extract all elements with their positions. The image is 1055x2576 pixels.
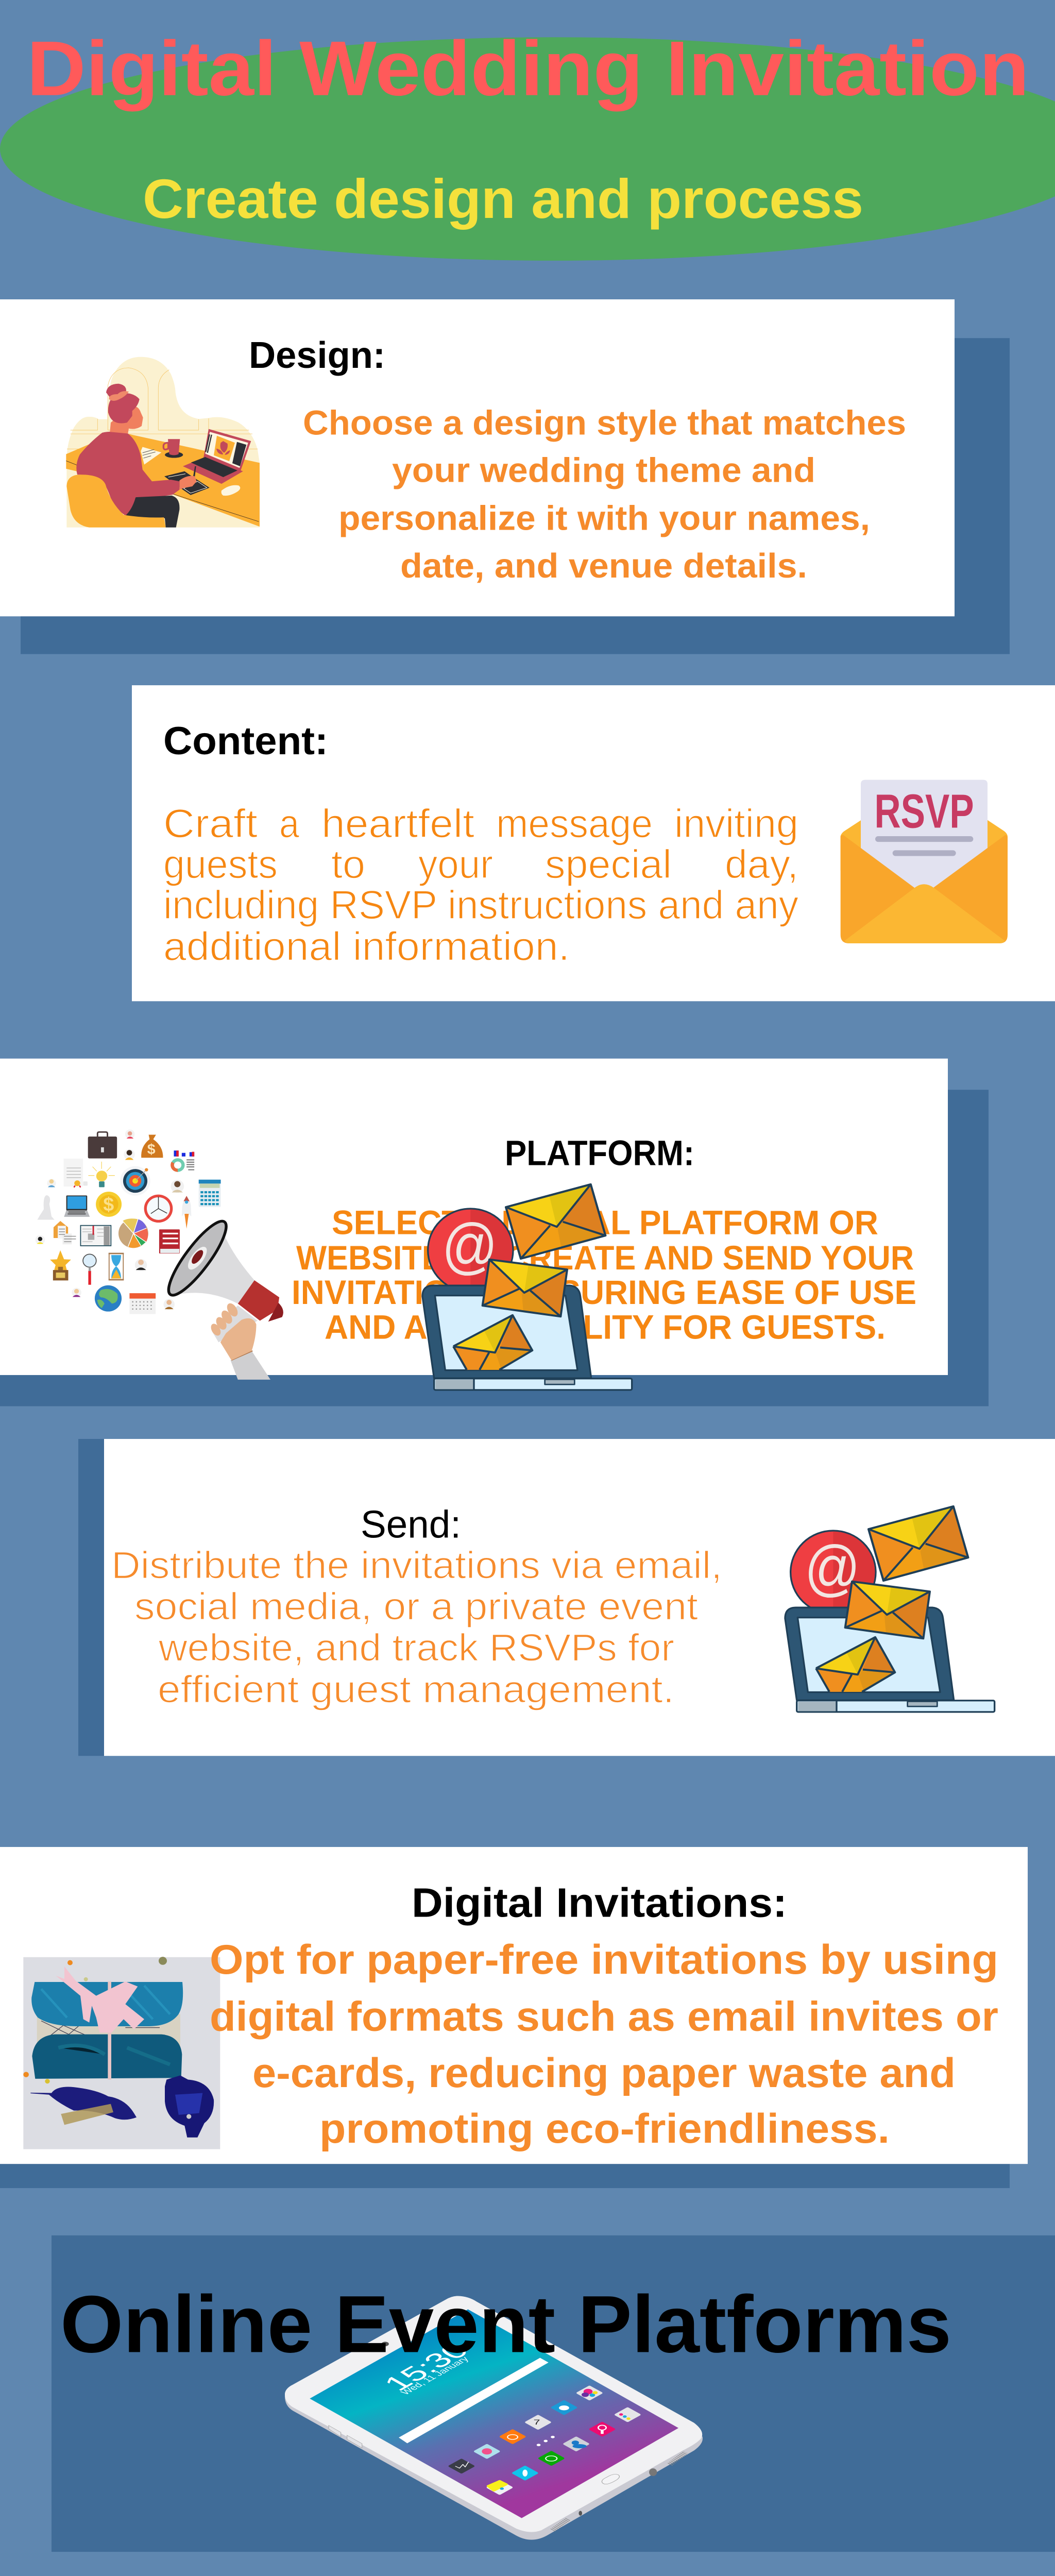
text: design body: your wedding theme and [392, 451, 815, 489]
header [0, 25, 1055, 261]
icon: RSVP envelope [841, 780, 1008, 943]
text: content body: special [545, 841, 672, 887]
text: design body: personalize it with your names, [338, 499, 870, 537]
text: content body: your [418, 841, 493, 887]
icon: RSVP envelope: RSVP [874, 784, 974, 838]
text: platform body: INVITATIONS, ENSURING EASE OF USE [292, 1274, 916, 1312]
text: content body: to [331, 841, 365, 887]
text: digital invitations body: Opt for paper-free invitations by using [210, 1937, 998, 1983]
icon: laptop with mail envelopes [785, 1506, 995, 1712]
text: design body [303, 404, 906, 585]
subtitle: Create design and process [143, 168, 863, 230]
heading: platform: PLATFORM: [505, 1133, 694, 1173]
text: design body: date, and venue details. [400, 547, 807, 585]
text: content body: message [496, 801, 653, 846]
heading: design: Design: [249, 335, 385, 376]
text: send body: social media, or a private event [134, 1585, 698, 1628]
icon: megaphone with business icons [36, 1129, 283, 1380]
text: digital invitations body: digital formats such as email invites or [210, 1993, 998, 2040]
panel: design [0, 299, 1010, 654]
text: design body: Choose a design style that matches [303, 404, 906, 443]
photo: handmade invitation envelope [23, 1957, 220, 2149]
heading: content: Content: [163, 719, 328, 763]
text: content body: Craft [163, 801, 258, 846]
text: content body: heartfelt [321, 801, 474, 846]
panel: content [132, 685, 1055, 1001]
icon: tablet: 7 [534, 2418, 540, 2427]
icon: tablet: Wed, 11 January [398, 2355, 471, 2396]
icon: laptop with mail envelopes, overlapping text [422, 1184, 632, 1390]
text: platform body [292, 1204, 916, 1346]
icon: tablet: 15:30 [377, 2339, 476, 2395]
text: platform body: SELECT A DIGITAL PLATFORM OR [332, 1204, 878, 1242]
text: send body [111, 1544, 722, 1710]
text: platform body: AND ACCESSIBILITY FOR GUESTS. [325, 1309, 886, 1346]
text: platform body: WEBSITE TO CREATE AND SEND YOUR [296, 1240, 914, 1277]
text: send body: efficient guest management. [158, 1668, 674, 1710]
text: content body: including RSVP instructions and any [163, 882, 798, 927]
text: send body: website, and track RSVPs for [158, 1626, 674, 1669]
icon: megaphone with business icons: $ [103, 1193, 114, 1215]
text: content body: a [279, 801, 299, 846]
green ellipse [0, 37, 1055, 261]
panel: platform [0, 1059, 989, 1406]
panel: send [78, 1439, 1055, 1756]
text: content body: additional information. [163, 923, 570, 969]
text: digital invitations body [210, 1937, 998, 2152]
text: content body: inviting [674, 801, 798, 846]
icon: megaphone with business icons: $ [147, 1141, 156, 1157]
heading: online event platforms: Online Event Platforms [60, 2279, 951, 2369]
icon: woman designing at laptop [66, 357, 260, 528]
text: content body: day, [725, 841, 798, 887]
icon: tablet [285, 2296, 703, 2540]
text: content body [163, 801, 798, 969]
text: digital invitations body: promoting eco-friendliness. [319, 2106, 890, 2152]
text: content body: guests [163, 841, 278, 887]
heading: digital invitations: Digital Invitations: [412, 1880, 787, 1926]
panel: online event platforms [52, 2235, 1055, 2552]
panel: digital invitations [0, 1847, 1028, 2188]
text: digital invitations body: e-cards, reducing paper waste and [252, 2050, 956, 2096]
title: Digital Wedding Invitation [27, 25, 1029, 112]
heading: send: Send: [361, 1503, 461, 1546]
text: send body: Distribute the invitations via email, [111, 1544, 722, 1586]
